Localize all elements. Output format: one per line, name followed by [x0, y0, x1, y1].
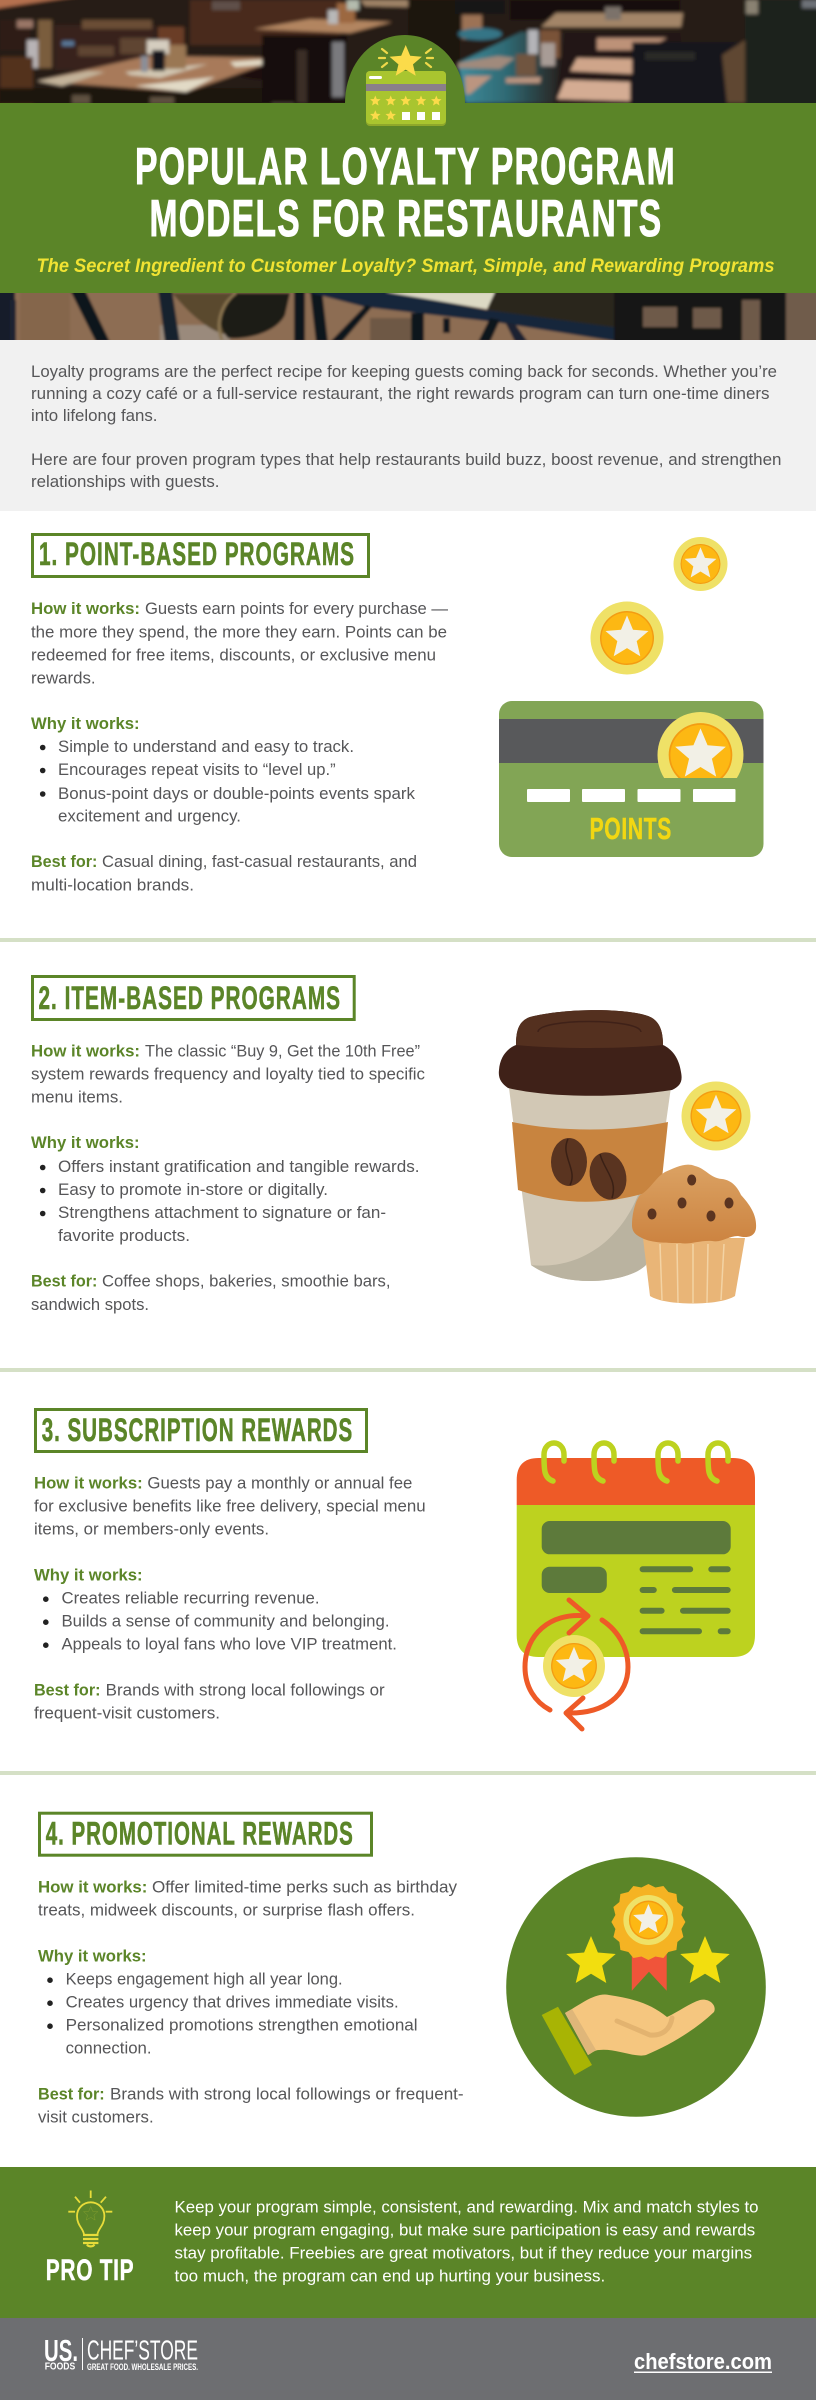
why it works: Appeals to loyal fans who love VIP treatment. — [62, 1636, 397, 1654]
intro text: running a cozy café or a full-service restaurant, the right rewards program can turn one-time diners — [31, 385, 769, 403]
why it works: excitement and urgency. — [58, 808, 241, 826]
how it works — [31, 600, 449, 688]
why it works: connection. — [66, 2040, 152, 2058]
how it works: rewards. — [31, 670, 96, 688]
coin — [682, 1082, 750, 1150]
logo: US Foods Chef'Store — [44, 2333, 198, 2372]
why it works — [38, 1947, 418, 2058]
why it works — [31, 1134, 420, 1245]
why it works: Simple to understand and easy to track. — [58, 738, 354, 756]
cup — [508, 1080, 672, 1281]
logo: US Foods Chef'Store: CHEF’STORE — [87, 2334, 198, 2366]
section 4: promotional rewards — [38, 1813, 766, 2127]
logo: US Foods Chef'Store: US. — [44, 2333, 78, 2368]
how it works: system rewards frequency and loyalty tied to specific — [31, 1066, 425, 1084]
header photo: restaurant interior — [0, 0, 816, 110]
best for: visit customers. — [38, 2109, 154, 2127]
subtitle: The Secret Ingredient to Customer Loyalty? Smart, Simple, and Rewarding Programs — [36, 256, 774, 277]
intro text: relationships with guests. — [31, 473, 220, 491]
intro text: into lifelong fans. — [31, 407, 158, 425]
why it works: Bonus-point days or double-points events spark — [58, 785, 416, 803]
best for: Best for: — [34, 1682, 100, 1700]
heading — [36, 1410, 366, 1452]
icon: loyalty card with star — [366, 45, 446, 126]
heading: 3. SUBSCRIPTION REWARDS — [42, 1412, 353, 1448]
why it works: Personalized promotions strengthen emotional — [66, 2017, 418, 2035]
icon: coffee cup, coin and muffin — [499, 1010, 756, 1304]
logo: US Foods Chef'Store: GREAT FOOD. WHOLESALE PRICES. — [87, 2362, 198, 2372]
best for — [31, 1273, 390, 1314]
intro panel — [0, 340, 816, 511]
heading — [32, 534, 368, 576]
best for: multi-location brands. — [31, 877, 194, 895]
best for: Best for: — [31, 1273, 97, 1291]
best for: Best for: — [31, 853, 97, 871]
why it works — [34, 1566, 397, 1654]
how it works: menu items. — [31, 1088, 123, 1106]
why it works: Why it works: — [34, 1566, 143, 1584]
tip text: Keep your program simple, consistent, and rewarding. Mix and match styles to — [174, 2198, 758, 2216]
how it works: treats, midweek discounts, or surprise flash offers. — [38, 1902, 415, 1920]
intro text: Loyalty programs are the perfect recipe for keeping guests coming back for seconds. Whether you’re — [31, 363, 777, 381]
icon: coins and points card: POINTS — [590, 811, 672, 846]
why it works — [31, 715, 416, 826]
icon: hand holding medal with stars — [506, 1857, 766, 2117]
how it works — [38, 1879, 458, 1920]
best for: sandwich spots. — [31, 1296, 149, 1314]
why it works: Offers instant gratification and tangible rewards. — [58, 1158, 420, 1176]
best for: Coffee shops, bakeries, smoothie bars, — [102, 1273, 390, 1291]
icon: light bulb with star — [68, 2190, 112, 2246]
how it works: items, or members-only events. — [34, 1521, 269, 1539]
website link: chefstore.com — [634, 2349, 772, 2374]
why it works: Why it works: — [38, 1947, 147, 1965]
intro text: Here are four proven program types that help restaurants build buzz, boost revenue, and strengthen — [31, 451, 782, 469]
why it works: Why it works: — [31, 715, 140, 733]
tip text: keep your program engaging, but make sure participation is easy and rewards — [174, 2222, 755, 2240]
icon: coins and points card — [499, 537, 764, 857]
why it works: Why it works: — [31, 1134, 140, 1152]
how it works — [31, 1042, 425, 1106]
how it works: How it works: — [31, 1042, 140, 1060]
why it works: Encourages repeat visits to “level up.” — [58, 761, 336, 779]
heading: 1. POINT-BASED PROGRAMS — [39, 536, 355, 572]
best for — [38, 2086, 464, 2127]
badge dome — [345, 35, 465, 104]
heading: 4. PROMOTIONAL REWARDS — [46, 1816, 354, 1852]
heading: 2. ITEM-BASED PROGRAMS — [38, 980, 341, 1016]
section 2: item-based programs — [31, 976, 756, 1314]
how it works: Guests earn points for every purchase — — [145, 600, 449, 618]
how it works: How it works: — [34, 1474, 143, 1492]
how it works: The classic “Buy 9, Get the 10th Free” — [145, 1042, 420, 1060]
best for — [34, 1682, 385, 1723]
best for: Best for: — [38, 2086, 105, 2104]
muffin — [643, 1238, 745, 1304]
how it works — [34, 1474, 426, 1539]
why it works: Creates urgency that drives immediate visits. — [66, 1994, 399, 2012]
how it works: redeemed for free items, discounts, or exclusive menu — [31, 647, 436, 665]
panel: pro tip — [0, 2167, 816, 2318]
why it works: Creates reliable recurring revenue. — [62, 1590, 320, 1608]
footer — [0, 2318, 816, 2400]
section 3: subscription rewards — [34, 1410, 755, 1729]
best for: frequent-visit customers. — [34, 1705, 220, 1723]
tip text: too much, the program can end up hurting your business. — [174, 2268, 605, 2286]
why it works: Easy to promote in-store or digitally. — [58, 1181, 328, 1199]
how it works: the more they spend, the more they earn. Points can be — [31, 624, 447, 642]
why it works: favorite products. — [58, 1227, 190, 1245]
best for: Casual dining, fast-casual restaurants, and — [102, 853, 417, 871]
header band — [0, 35, 816, 293]
title — [135, 138, 676, 248]
why it works: Builds a sense of community and belonging. — [62, 1613, 390, 1631]
best for: Brands with strong local followings or — [106, 1682, 385, 1700]
tip text: stay profitable. Freebies are great motivators, but if they reduce your margins — [174, 2245, 752, 2263]
icon: calendar with renewing coin — [517, 1443, 755, 1729]
how it works: for exclusive benefits like free delivery, special menu — [34, 1498, 426, 1516]
lower photo strip — [0, 293, 816, 340]
how it works: Guests pay a monthly or annual fee — [147, 1474, 412, 1492]
why it works: Strengthens attachment to signature or fan- — [58, 1204, 386, 1222]
why it works: Keeps engagement high all year long. — [66, 1971, 343, 1989]
section 1: point-based programs — [31, 534, 764, 895]
best for — [31, 853, 417, 895]
how it works: How it works: — [38, 1879, 147, 1897]
best for: Brands with strong local followings or frequent- — [110, 2086, 464, 2104]
intro text — [31, 363, 782, 491]
tip text — [174, 2198, 758, 2286]
logo: US Foods Chef'Store: FOODS — [45, 2362, 75, 2372]
heading — [32, 976, 354, 1020]
how it works: How it works: — [31, 600, 140, 618]
heading — [40, 1813, 372, 1855]
pro tip label: PRO TIP — [46, 2254, 134, 2287]
how it works: Offer limited-time perks such as birthday — [152, 1879, 458, 1897]
band background — [0, 103, 816, 293]
